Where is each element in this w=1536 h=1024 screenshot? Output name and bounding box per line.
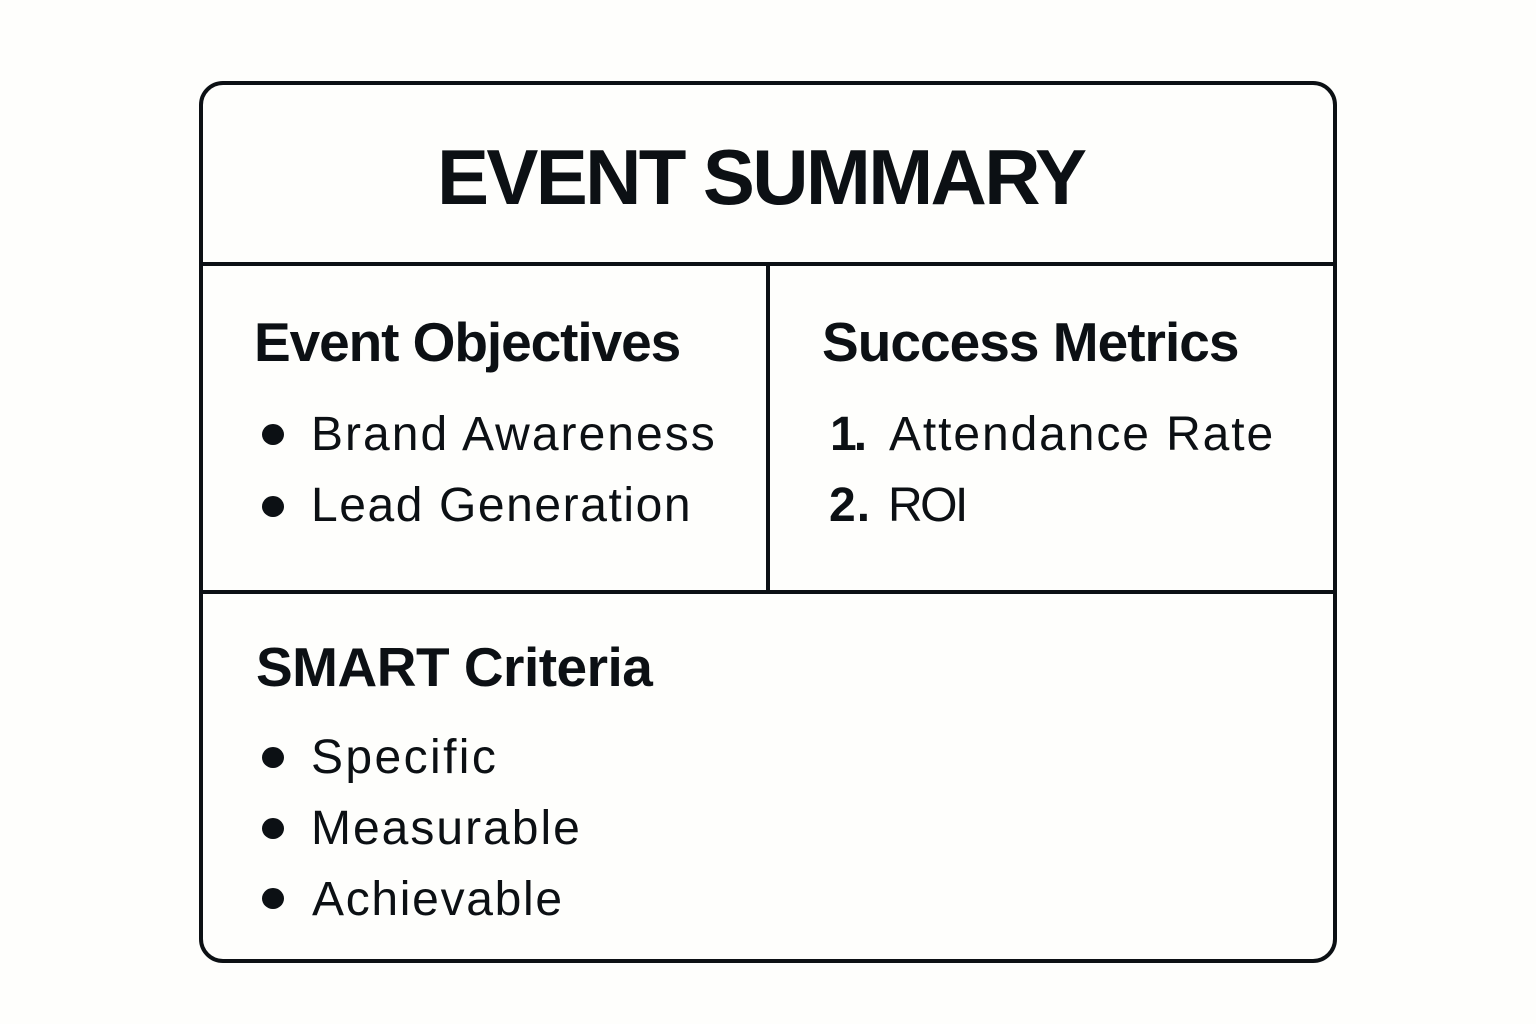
- panel: success metrics: [822, 311, 1275, 532]
- panel: event objectives: [254, 311, 717, 532]
- bullet: brand awareness: Brand Awareness: [311, 408, 717, 460]
- bullet dot 2: [262, 496, 284, 517]
- bullet dot 2: [262, 818, 284, 839]
- bullet dot 3: [262, 888, 284, 909]
- bullet dot 1: [262, 424, 284, 445]
- title: EVENT SUMMARY: [437, 132, 1084, 220]
- heading: smart criteria: SMART Criteria: [256, 636, 652, 698]
- bullet: specific: Specific: [311, 731, 498, 784]
- item: roi: ROI: [888, 479, 966, 532]
- number 2: 2.: [829, 479, 871, 532]
- bullet: achievable: Achievable: [312, 873, 564, 926]
- main card: [199, 81, 1337, 963]
- panel: smart criteria: [256, 636, 654, 926]
- item: attendance rate: Attendance Rate: [889, 408, 1275, 460]
- bullet: measurable: Measurable: [311, 802, 582, 855]
- heading: success metrics: Success Metrics: [822, 311, 1239, 373]
- heading: event objectives: Event Objectives: [254, 311, 680, 373]
- bullet: lead generation: Lead Generation: [311, 479, 692, 532]
- bullet dot 1: [262, 747, 284, 768]
- number 1: 1.: [830, 408, 864, 460]
